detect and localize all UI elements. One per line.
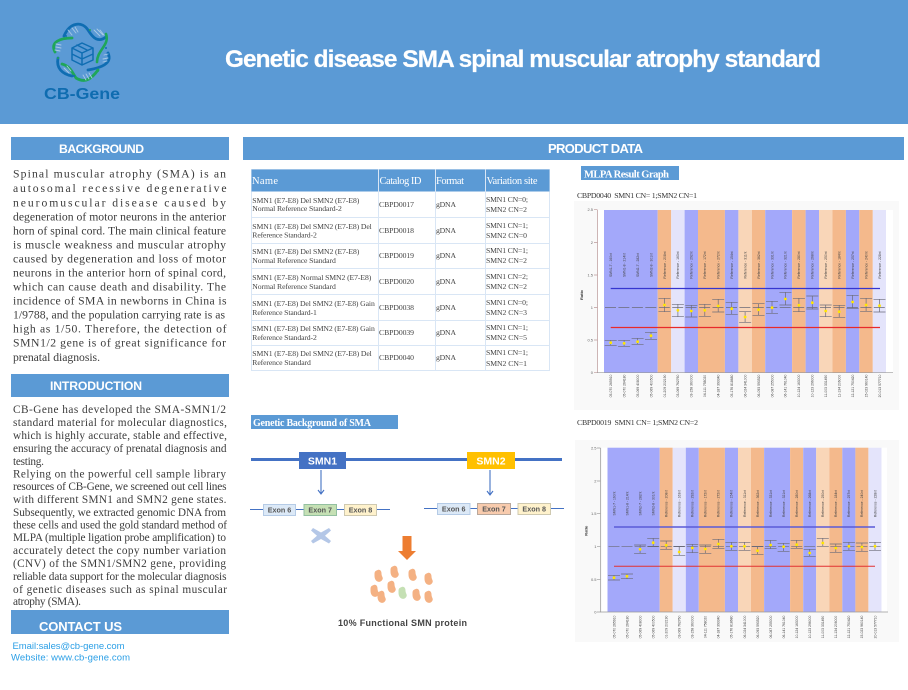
heading: product data <box>243 137 904 160</box>
heading: introduction <box>11 374 229 397</box>
text: introduction: which is highly accurate, stable and effective, <box>13 430 227 442</box>
chart axes: 1.5 <box>591 511 597 516</box>
header banner <box>0 0 908 124</box>
row CBPD0039: SMN1 CN=1; <box>486 323 528 332</box>
x axis labels: 06-141 761040 <box>784 374 788 397</box>
probe labels: Reference - 240nt <box>860 490 864 517</box>
row CBPD0040 <box>252 348 528 368</box>
probe labels: SMN2-7 - 282nt <box>636 253 640 277</box>
text: introduction: resources of CB-Gene, we screened out cell lines <box>13 481 226 493</box>
row CBPD0017: SMN2 CN=2 <box>486 205 527 214</box>
x axis labels: 15-023 960140 <box>860 615 864 638</box>
text: introduction: of genetic diseases such as spinal muscular <box>13 584 227 596</box>
x axis labels: 04-187 393340 <box>716 374 720 397</box>
chart axes: 2 <box>591 240 594 245</box>
row CBPD0039: Reference Standard-2 <box>252 333 317 342</box>
text: background <box>13 168 227 364</box>
email: Email:sales@cb-gene.com <box>12 641 125 652</box>
text: introduction: ensuring the accuracy of prenatal diagnosis and <box>13 443 227 455</box>
error bars <box>605 292 886 346</box>
text: background: degeneration of motor neurons in the anterior <box>13 211 226 224</box>
exon 6 left: Exon 6 <box>268 506 291 515</box>
probe labels: SMN1-7 - 160nt <box>612 491 616 515</box>
heading: genetic background: Genetic Background of SMA <box>253 418 372 429</box>
chart axes: 2.5 <box>591 446 597 450</box>
text: introduction: reliable data support for the molecular diagnosis <box>13 571 226 583</box>
x axis labels: 11-003 331490 <box>821 616 825 638</box>
x axis labels: 03-069 762760 <box>676 374 680 397</box>
x axis labels: 05-070 265910 <box>612 615 616 638</box>
x axis labels: 05-070 264180 <box>622 374 626 397</box>
table header row: Format <box>436 176 464 187</box>
heading: MLPA result graph: MLPA Result Graph <box>584 170 669 180</box>
row CBPD0040: SMN1 (E7-E8) Del SMN2 (E7-E8) Del <box>252 349 372 358</box>
row CBPD0018: CBPD0018 <box>379 226 414 235</box>
exon 7 left: Exon 7 <box>308 506 332 515</box>
probe labels: Reference - 172nt <box>704 490 708 517</box>
row CBPD0038: SMN2 CN=3 <box>486 308 527 317</box>
icon: cross mark <box>311 528 331 544</box>
x axis labels: 03-069 762760 <box>678 615 682 638</box>
text: background: which can cause death and disability. The <box>13 281 226 294</box>
protein blobs <box>370 566 433 603</box>
probe labels: Reference - 292nt <box>690 251 694 279</box>
text: background: prenatal diagnosis. <box>13 351 100 364</box>
x axis labels: 05-176 818680 <box>730 615 734 638</box>
logo <box>44 24 120 103</box>
x axis labels: 10-123 296000 <box>808 615 812 638</box>
row CBPD0018: SMN1 (E7-E8) Del SMN2 (E7-E8) Del <box>252 222 372 231</box>
arrow: SMN2 to exons <box>487 470 493 495</box>
chart axes: 0 <box>591 370 594 375</box>
threshold lines <box>614 527 875 566</box>
x axis labels: 04-111 758020 <box>704 616 708 638</box>
text: introduction: CB-Gene has developed the SMA-SMN1/2 <box>13 404 226 416</box>
caption: chart CBPD0019: CBPD0019 SMN1 CN= 1;SMN2 CN=2 <box>577 418 698 427</box>
x axis labels: 20-013 577710 <box>873 615 877 638</box>
heading: contact us: CONTACT US <box>39 619 122 634</box>
x axis labels: 06-093 593520 <box>757 374 761 397</box>
panel: introduction <box>11 374 229 608</box>
chart axes: Ratio <box>579 289 584 300</box>
probe labels: Reference - 321nt <box>782 490 786 517</box>
text: background: autosomal recessive degenerative <box>13 182 226 195</box>
text: introduction: these cells and used the gold standard method of <box>13 520 227 532</box>
x axis labels: 12-121 750420 <box>851 374 855 397</box>
heading: introduction: INTRODUCTION <box>50 379 142 393</box>
logo wordmark: CB-Gene <box>44 86 120 103</box>
text: introduction: atrophy (SMA). <box>13 596 81 608</box>
exon 8 right: Exon 8 <box>522 505 546 514</box>
probe labels: Reference - 228nt <box>873 490 877 517</box>
row CBPD0020: SMN1 CN=2; <box>486 272 528 281</box>
probe labels: Reference - 163nt <box>678 490 682 517</box>
row CBPD0017: SMN1 CN=0; <box>486 195 528 204</box>
probe labels: Reference - 154nt <box>730 251 734 279</box>
row CBPD0038: SMN1 CN=0; <box>486 298 528 307</box>
chart axes: 1 <box>591 305 594 310</box>
chart axes: 0.5 <box>587 338 594 342</box>
probe labels: Reference - 250nt <box>821 490 825 517</box>
x axis labels: 10-123 296000 <box>811 374 815 397</box>
table header row <box>252 170 550 192</box>
probe labels: Reference - 311nt <box>743 251 747 278</box>
row CBPD0040: gDNA <box>436 353 456 362</box>
text: background: incidence of SMA in newborns in China is <box>13 295 227 308</box>
table header row: Variation site <box>486 176 538 187</box>
table header row: Catalog ID <box>380 176 422 187</box>
row CBPD0020 <box>252 272 528 291</box>
data points <box>611 299 880 343</box>
text: introduction: accurately detect the copy number variation <box>13 545 226 557</box>
row CBPD0038: CBPD0038 <box>379 303 414 312</box>
x axis labels: 01-209 202190 <box>664 615 668 638</box>
row CBPD0018 <box>252 221 528 240</box>
x axis labels: 05-069 400500 <box>652 615 656 638</box>
text: background: Spinal muscular atrophy (SMA) is an <box>13 168 226 181</box>
text: background: 1/9788, and the population carrying rate is as <box>13 309 225 322</box>
probe labels: Reference - 362nt <box>757 251 761 279</box>
box: SMN1: SMN1 <box>308 456 337 468</box>
caption: chart CBPD0040: CBPD0040 SMN1 CN= 1;SMN2 CN=1 <box>577 191 697 200</box>
probe labels: Reference - 272nt <box>717 490 721 517</box>
heading: MLPA result graph <box>581 166 679 180</box>
chart axes: 0 <box>594 610 597 614</box>
probe labels: SMN1-7 - 160nt <box>609 253 613 277</box>
x axis labels: 06-024 341000 <box>743 615 747 638</box>
x axis labels: 05-069 408000 <box>636 374 640 397</box>
box: SMN2: SMN2 <box>476 456 506 468</box>
row CBPD0019 <box>252 246 528 265</box>
text: background: caused by degeneration and loss of motor <box>13 253 226 266</box>
chart axes <box>584 446 888 614</box>
x axis labels: 06-141 761040 <box>782 615 786 638</box>
chart axes <box>579 207 893 375</box>
row CBPD0017: SMN1 (E7-E8) Del SMN2 (E7-E8) <box>252 196 360 205</box>
x axis labels: 10-124 163000 <box>795 615 799 638</box>
chart: CBPD0040 MLPA ratio <box>574 201 899 410</box>
chart bands <box>604 210 886 373</box>
probe labels: Reference - 331nt <box>769 490 773 517</box>
x axis labels: 03-158 360000 <box>691 615 695 638</box>
probe labels: Reference - 257nt <box>851 251 855 279</box>
row CBPD0040: SMN2 CN=1 <box>486 359 527 368</box>
probe labels: Reference - 184nt <box>834 490 838 517</box>
row CBPD0018: SMN2 CN=0 <box>486 231 527 240</box>
probe labels: Reference - 163nt <box>676 251 680 279</box>
x axis labels: 05-069 408000 <box>638 615 642 638</box>
arrow: SMN1 to exons <box>318 470 324 494</box>
row CBPD0038: gDNA <box>436 303 456 312</box>
text: introduction: (CNV) of the SMN1/SMN2 gene, providing <box>13 558 226 570</box>
row CBPD0018: gDNA <box>436 226 456 235</box>
box: SMN1 <box>299 452 346 469</box>
title: Genetic disease SMA spinal muscular atrophy standard <box>225 46 821 73</box>
x axis labels: 20-013 577710 <box>878 374 882 397</box>
probe labels: Reference - 292nt <box>691 490 695 517</box>
row CBPD0020: gDNA <box>436 277 456 286</box>
row CBPD0038: Reference Standard-1 <box>252 308 317 317</box>
text: introduction: Relying on the powerful cell sample library <box>13 468 226 480</box>
row CBPD0039: SMN1 (E7-E8) Del SMN2 (E7-E8) Gain <box>252 324 375 333</box>
x axis labels: 05-176 818680 <box>730 374 734 397</box>
chart axes: 2.5 <box>587 207 594 212</box>
probe labels: Reference - 268nt <box>808 490 812 517</box>
text: background: neuromuscular disease caused by <box>13 197 226 210</box>
text: introduction: MLPA (multiple ligation probe amplification) to <box>13 532 226 544</box>
text: introduction: with different SMN1 and SMN2 gene states. <box>13 494 227 506</box>
website: Website: www.cb-gene.com <box>11 652 130 664</box>
row CBPD0017: CBPD0017 <box>379 200 414 209</box>
x axis labels: 11-134 206000 <box>838 375 842 397</box>
exon 7 right: Exon 7 <box>482 505 506 514</box>
panel: background <box>11 137 229 364</box>
text: introduction <box>13 404 227 608</box>
probe labels: Reference - 331nt <box>770 251 774 279</box>
row CBPD0019: SMN1 (E7-E8) Del SMN2 (E7-E8) <box>252 247 360 256</box>
text: introduction: testing. <box>13 456 44 468</box>
x axis labels: 03-158 360000 <box>690 374 694 397</box>
x axis labels: 06-087 255000 <box>770 374 774 397</box>
row CBPD0017 <box>252 195 528 214</box>
chart axes: Ratio <box>584 525 588 536</box>
row CBPD0039: gDNA <box>436 328 456 337</box>
row CBPD0018: SMN1 CN=1; <box>486 221 528 230</box>
probe labels <box>609 251 882 279</box>
data points <box>614 543 875 578</box>
exon 8 left: Exon 8 <box>349 506 372 515</box>
probe labels: SMN2-8 - 301nt <box>652 491 656 515</box>
x axis labels: 06-087 255000 <box>769 615 773 638</box>
x axis labels: 11-134 206000 <box>834 616 838 638</box>
row CBPD0040: Reference Standard <box>252 358 311 367</box>
chart bands <box>608 448 882 612</box>
probe labels: SMN2-8 - 301nt <box>649 253 653 277</box>
probe labels: Reference - 228nt <box>878 251 882 279</box>
row CBPD0038: SMN1 (E7-E8) Del SMN2 (E7-E8) Gain <box>252 299 375 308</box>
row CBPD0020: SMN1 (E7-E8) Normal SMN2 (E7-E8) <box>252 273 372 282</box>
probe labels <box>612 490 877 517</box>
probe labels: Reference - 311nt <box>743 490 747 517</box>
probe labels: Reference - 250nt <box>824 251 828 279</box>
x axis labels: 12-121 750420 <box>847 615 851 638</box>
row CBPD0020: SMN2 CN=2 <box>486 282 527 291</box>
probe labels: Reference - 321nt <box>784 251 788 279</box>
heading: product data: PRODUCT DATA <box>548 141 644 156</box>
probe labels: Reference - 280nt <box>797 251 801 279</box>
probe labels: Reference - 280nt <box>795 490 799 517</box>
probe labels: Reference - 240nt <box>864 251 868 279</box>
probe labels: SMN1-8 - 214nt <box>625 491 629 515</box>
probe labels: Reference - 257nt <box>847 490 851 517</box>
probe labels: Reference - 268nt <box>811 251 815 279</box>
x axis labels: 11-003 331490 <box>824 375 828 397</box>
x axis labels: 04-187 393340 <box>717 615 721 638</box>
error bars <box>608 538 881 580</box>
threshold lines <box>611 288 880 328</box>
probe labels: Reference - 172nt <box>703 251 707 279</box>
chart axes: 0.5 <box>591 577 597 582</box>
text: introduction: standard material for molecular diagnostics, <box>13 417 227 429</box>
row CBPD0018: Reference Standard-2 <box>252 230 317 239</box>
text: background: high as 1/50. Therefore, the detection of <box>13 323 227 336</box>
probe labels: Reference - 362nt <box>756 490 760 517</box>
panel: genetic background of SMA <box>250 415 564 628</box>
text: background: neurons in the anterior horn of spinal cord, <box>13 267 226 280</box>
heading: genetic background <box>251 415 398 429</box>
panel: contact <box>11 610 229 664</box>
text: background: horn of spinal cord. The main clinical feature <box>13 225 226 238</box>
probe labels: Reference - 154nt <box>730 490 734 517</box>
row CBPD0039: SMN2 CN=5 <box>486 333 527 342</box>
row CBPD0017: gDNA <box>436 200 456 209</box>
probe labels: Reference - 272nt <box>716 251 720 279</box>
text: introduction: Subsequently, we extracted genomic DNA from <box>13 507 226 519</box>
row CBPD0019: SMN1 CN=1; <box>486 246 528 255</box>
gene line <box>251 458 562 461</box>
table header row: Name <box>252 176 278 187</box>
x axis labels: 15-023 960140 <box>864 374 868 397</box>
text: background: SMN1/2 gene is of great significance for <box>13 337 226 350</box>
table: products <box>251 169 550 371</box>
x axis labels: 05-069 400500 <box>649 374 653 397</box>
x axis labels: 05-070 264180 <box>625 615 629 638</box>
probe labels: Reference - 208nt <box>664 490 668 517</box>
chart axes: 1 <box>594 544 597 549</box>
probe labels: Reference - 184nt <box>838 251 842 279</box>
x axis labels <box>612 615 877 638</box>
chart axes: 2 <box>594 478 597 484</box>
probe labels: SMN1-8 - 214nt <box>622 253 626 277</box>
row CBPD0040: CBPD0040 <box>379 353 414 362</box>
heading: background <box>11 137 229 160</box>
x axis labels <box>609 374 882 397</box>
box: SMN2 <box>467 452 515 469</box>
x axis labels: 04-111 758020 <box>703 375 707 397</box>
arrow: orange down <box>398 536 416 560</box>
row CBPD0019: gDNA <box>436 251 456 260</box>
x axis labels: 10-124 163000 <box>797 374 801 397</box>
row CBPD0020: Normal Reference Standard <box>252 282 336 291</box>
heading: contact us <box>11 610 229 634</box>
row CBPD0017: Normal Reference Standard-2 <box>252 204 342 213</box>
row CBPD0039 <box>252 323 528 342</box>
row CBPD0019: CBPD0019 <box>379 251 414 260</box>
chart: CBPD0019 MLPA ratio <box>575 440 899 642</box>
x axis labels: 06-093 593520 <box>756 615 760 638</box>
text: background: is muscle weakness and muscular atrophy <box>13 239 226 252</box>
row CBPD0019: Normal Reference Standard <box>252 256 336 265</box>
row CBPD0020: CBPD0020 <box>379 277 414 286</box>
x axis labels: 01-209 202190 <box>663 374 667 397</box>
probe labels: Reference - 208nt <box>663 251 667 279</box>
row CBPD0039: CBPD0039 <box>379 328 414 337</box>
row CBPD0019: SMN2 CN=2 <box>486 256 527 265</box>
caption: functional protein: 10% Functional SMN protein <box>338 618 467 628</box>
row CBPD0038 <box>252 298 528 317</box>
x axis labels: 06-024 341000 <box>743 374 747 397</box>
heading: background: BACKGROUND <box>59 142 144 156</box>
exon 6 right: Exon 6 <box>442 505 465 514</box>
SMN1 exons <box>250 504 390 516</box>
chart axes: 1.5 <box>587 272 594 278</box>
x axis labels: 05-070 265910 <box>609 374 613 397</box>
probe labels: SMN2-7 - 282nt <box>638 491 642 515</box>
SMN2 exons <box>424 504 564 514</box>
row CBPD0040: SMN1 CN=1; <box>486 348 528 357</box>
